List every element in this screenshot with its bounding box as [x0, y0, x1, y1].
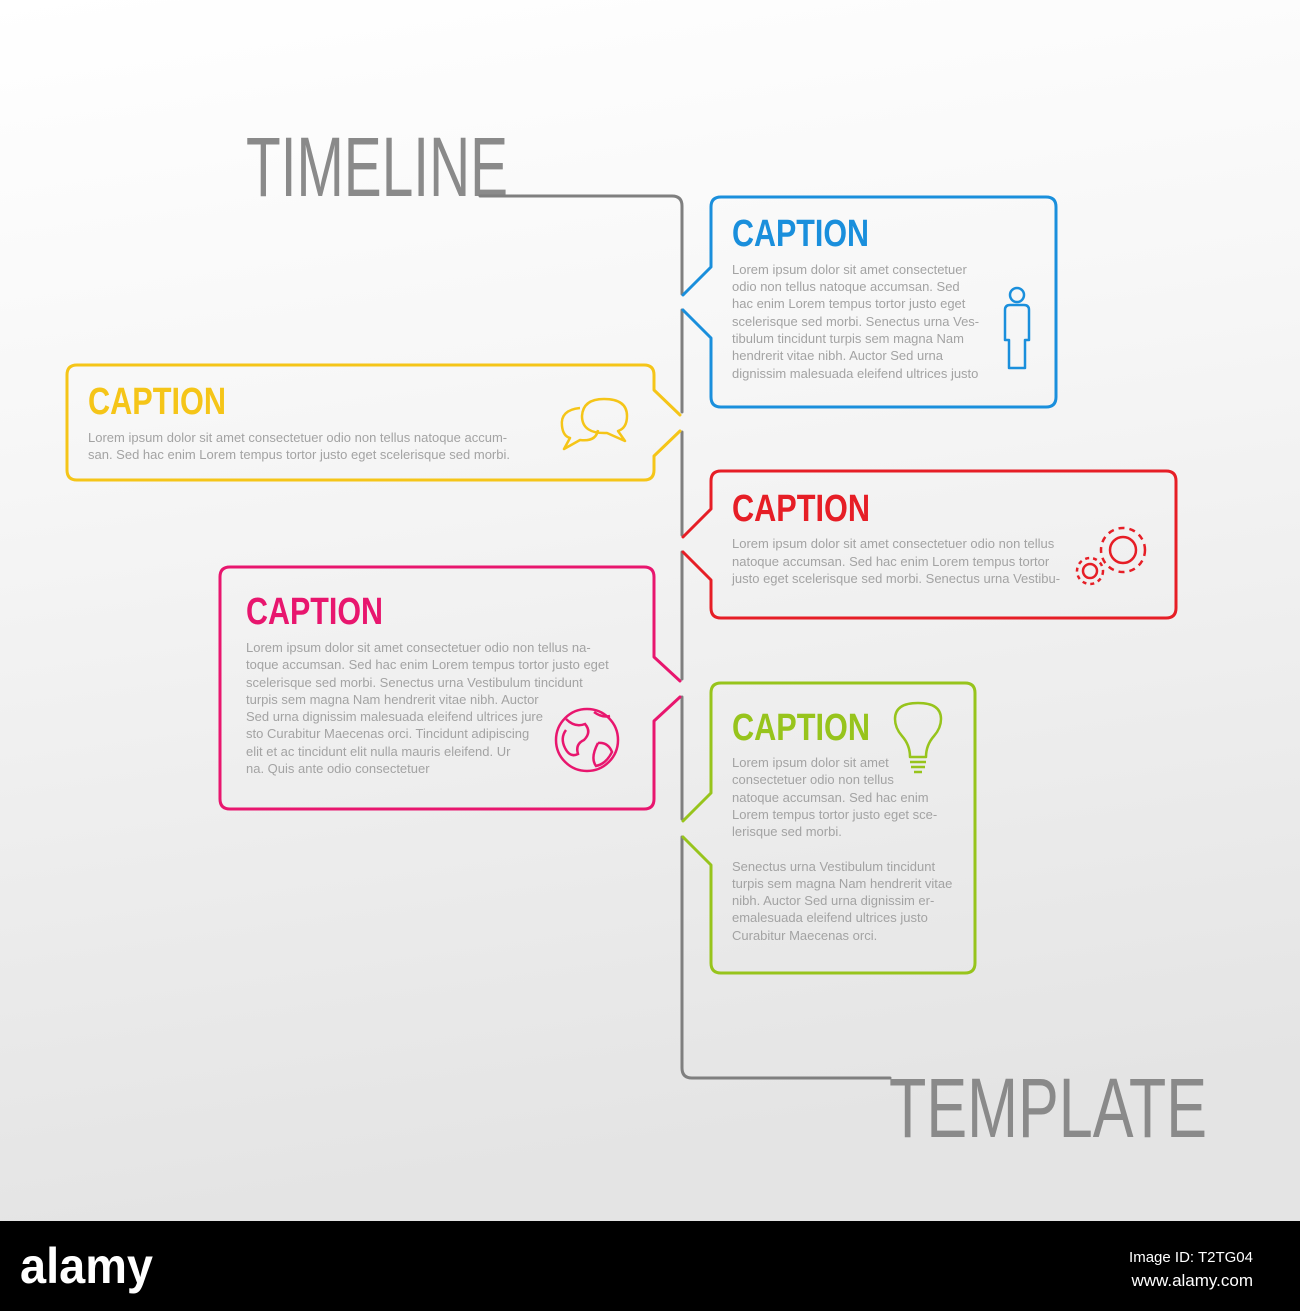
panel: yellow caption [67, 365, 680, 480]
panel: green caption: nibh. Auctor Sed urna dignissim er- [732, 893, 934, 908]
panel: red caption: natoque accumsan. Sed hac enim Lorem tempus tortor [732, 554, 1050, 569]
panel: red caption [683, 471, 1176, 618]
panel: red caption: justo eget scelerisque sed morbi. Senectus urna Vestibu- [731, 571, 1060, 586]
panel: pink caption: toque accumsan. Sed hac enim Lorem tempus tortor justo eget [246, 657, 609, 672]
panel: green caption: Lorem ipsum dolor sit amet [732, 755, 889, 770]
panel: green caption: Curabitur Maecenas orci. [732, 928, 877, 943]
panel: green caption: consectetuer odio non tellus [732, 772, 894, 787]
panel: red caption: Lorem ipsum dolor sit amet consectetuer odio non tellus [732, 536, 1055, 551]
panel: pink caption [220, 567, 680, 809]
panel: blue caption: tibulum tincidunt turpis sem magna Nam [732, 331, 964, 346]
panel: green caption: CAPTION [732, 707, 870, 749]
footer info text [1129, 1249, 1253, 1290]
title: TIMELINE: TIMELINE [246, 120, 508, 214]
panel: yellow caption: Lorem ipsum dolor sit amet consectetuer odio non tellus natoque accum- [88, 430, 507, 445]
icon: person [1005, 288, 1029, 368]
panel: blue caption: hac enim Lorem tempus tortor justo eget [732, 296, 966, 311]
panel: pink caption: turpis sem magna Nam hendrerit vitae nibh. Auctor [246, 692, 539, 707]
panel: green caption: turpis sem magna Nam hendrerit vitae [732, 876, 952, 891]
panel: blue caption [683, 197, 1056, 407]
panel: pink caption: elit et ac tincidunt elit nulla mauris eleifend. Ur [246, 744, 511, 759]
panel: blue caption: dignissim malesuada eleifend ultrices justo [732, 366, 978, 381]
panel: blue caption: hendrerit vitae nibh. Auctor Sed urna [732, 348, 944, 363]
panel: blue caption: scelerisque sed morbi. Senectus urna Ves- [732, 314, 979, 329]
panel: red caption: CAPTION [732, 488, 870, 530]
panel: yellow caption: san. Sed hac enim Lorem tempus tortor justo eget scelerisque sed morbi. [88, 447, 510, 462]
panel: yellow caption: CAPTION [88, 381, 226, 423]
panel: green caption [683, 683, 975, 973]
panel: blue caption: odio non tellus natoque accumsan. Sed [732, 279, 960, 294]
footer info text: Image ID: T2TG04 [1129, 1249, 1253, 1266]
logo: alamy: alamy [20, 1238, 153, 1294]
panel: pink caption: Sed urna dignissim malesuada eleifend ultrices jure [246, 709, 543, 724]
panel: green caption: Lorem tempus tortor justo eget sce- [732, 807, 937, 822]
timeline spine [480, 196, 890, 1078]
icon: lightbulb [895, 703, 941, 772]
footer info text: www.alamy.com [1130, 1271, 1253, 1290]
panel: green caption: Senectus urna Vestibulum tincidunt [732, 859, 935, 874]
panel: pink caption: sto Curabitur Maecenas orci. Tincidunt adipiscing [246, 726, 529, 741]
panel: pink caption: na. Quis ante odio consectetuer [246, 761, 430, 776]
panel: green caption: lerisque sed morbi. [732, 824, 842, 839]
panel: blue caption: Lorem ipsum dolor sit amet consectetuer [732, 262, 967, 277]
panel: green caption: natoque accumsan. Sed hac enim [732, 790, 929, 805]
panel: green caption: emalesuada eleifend ultrices justo [732, 910, 928, 925]
panel: blue caption: CAPTION [732, 213, 869, 255]
icon: gears [1077, 528, 1145, 584]
icon: speech bubbles [562, 399, 627, 449]
footer band [0, 1221, 1300, 1311]
panel: pink caption: scelerisque sed morbi. Senectus urna Vestibulum tincidunt [246, 675, 583, 690]
icon: globe [556, 709, 618, 771]
panel: pink caption: Lorem ipsum dolor sit amet consectetuer odio non tellus na- [246, 640, 591, 655]
panel: pink caption: CAPTION [246, 591, 383, 633]
